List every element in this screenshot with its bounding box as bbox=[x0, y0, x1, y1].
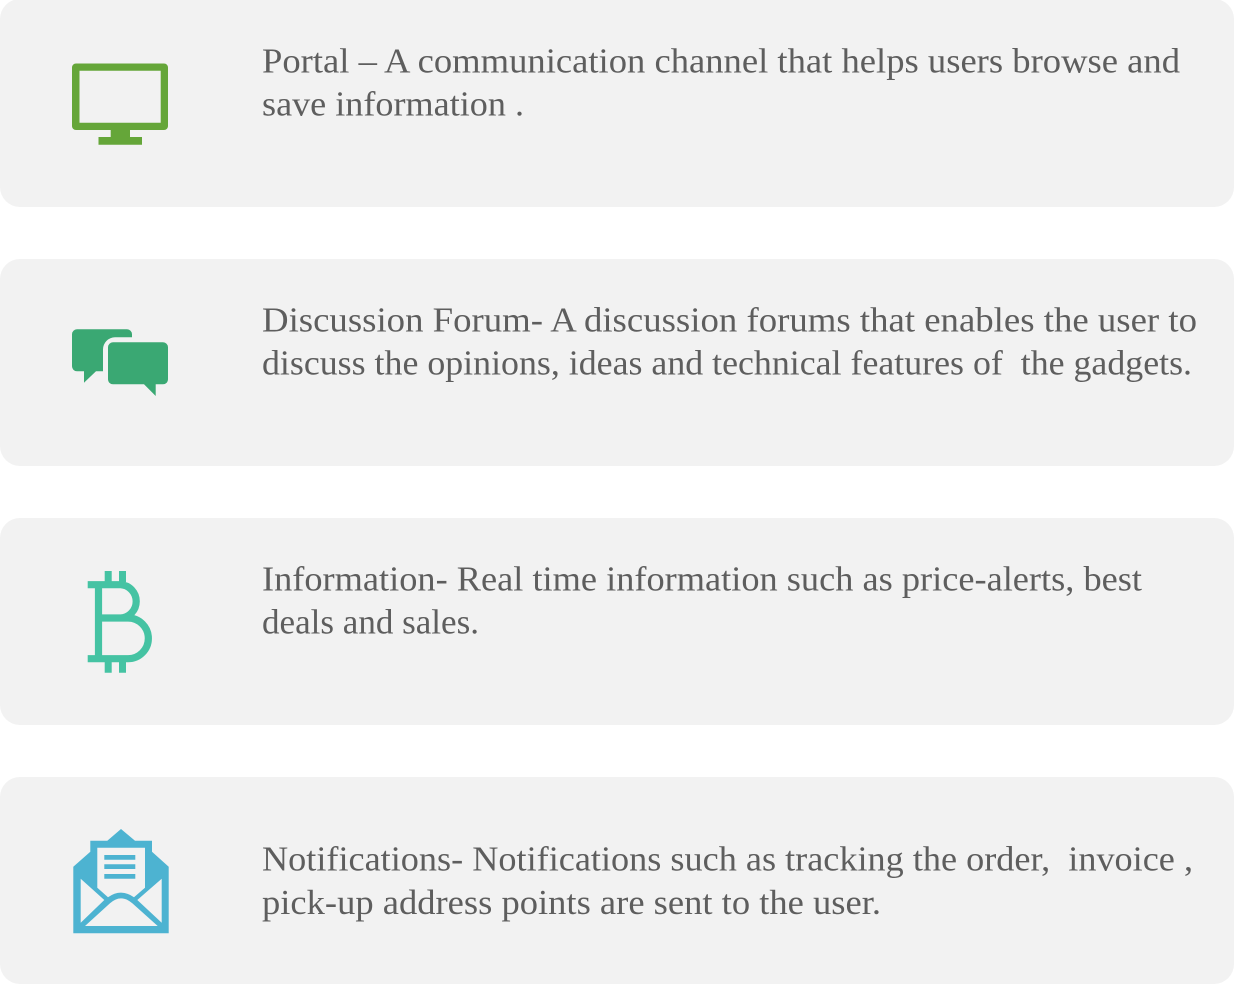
notifications text bbox=[262, 840, 1193, 922]
panel: information bbox=[0, 518, 1234, 725]
notifications text: Notifications- Notifications such as tracking the order, invoice , bbox=[262, 840, 1193, 878]
information text bbox=[262, 560, 1142, 642]
information text: deals and sales. bbox=[262, 602, 479, 642]
notifications text: pick-up address points are sent to the user. bbox=[262, 883, 881, 922]
discussion forum text bbox=[262, 300, 1197, 382]
portal text bbox=[262, 42, 1181, 124]
icon: monitor bbox=[72, 64, 168, 145]
information text: Information- Real time information such as price-alerts, best bbox=[262, 560, 1142, 598]
icon: bitcoin bbox=[88, 571, 148, 673]
panel: notifications bbox=[0, 777, 1234, 984]
icon: open envelope bbox=[73, 829, 169, 933]
discussion forum text: Discussion Forum- A discussion forums that enables the user to bbox=[262, 300, 1197, 340]
portal text: save information . bbox=[262, 84, 524, 124]
panel: portal bbox=[0, 0, 1234, 207]
portal text: Portal – A communication channel that helps users browse and bbox=[262, 42, 1181, 80]
panel: discussion forum bbox=[0, 259, 1234, 466]
discussion forum text: discuss the opinions, ideas and technical features of the gadgets. bbox=[262, 344, 1192, 382]
icon: chat bubbles bbox=[72, 329, 168, 396]
